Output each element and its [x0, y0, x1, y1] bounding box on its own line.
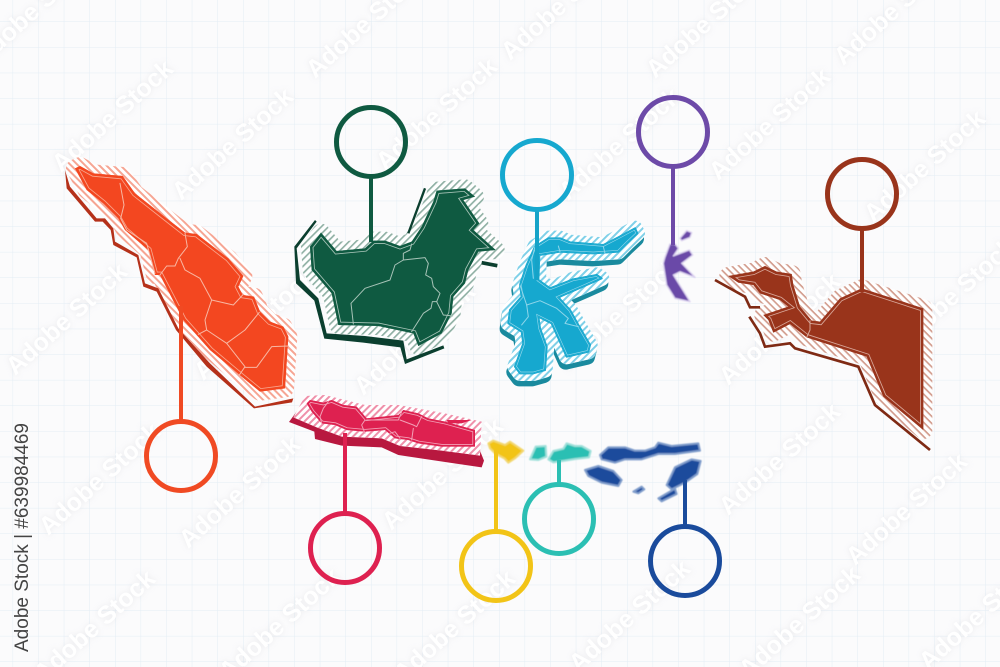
watermarks: Adobe Stock — [34, 417, 166, 541]
watermarks: Adobe Stock — [349, 277, 481, 401]
watermarks: Adobe Stock — [47, 54, 179, 178]
map: Papua — [715, 266, 930, 450]
map: East Nusa Tenggara — [585, 443, 701, 501]
vertical stock id text: Adobe Stock | #639984469 — [12, 423, 33, 652]
watermarks: Adobe Stock — [714, 397, 846, 521]
map: Kalimantan — [294, 188, 497, 364]
ring: Sulawesi — [502, 140, 572, 210]
map: Maluku — [663, 231, 695, 302]
ring: Bali — [462, 532, 530, 600]
map: Sumatra — [65, 166, 293, 408]
watermarks: Adobe Stock — [371, 52, 503, 176]
watermarks: Adobe Stock — [859, 104, 991, 228]
ring: East Nusa Tenggara — [650, 526, 720, 596]
watermarks: Adobe Stock — [174, 430, 306, 554]
ring: Kalimantan — [336, 108, 406, 176]
map: Sulawesi — [507, 228, 637, 379]
ring: Java — [310, 514, 380, 582]
watermarks: Adobe Stock — [554, 252, 686, 376]
marker rings — [146, 98, 896, 600]
watermarks: Adobe Stock — [841, 447, 973, 571]
watermarks: Adobe Stock — [377, 412, 509, 536]
ring: Papua — [828, 160, 896, 228]
ring: Maluku — [638, 98, 708, 166]
map: West Nusa Tenggara — [530, 443, 591, 462]
watermarks: Adobe Stock — [189, 262, 321, 386]
connector lines — [181, 168, 862, 530]
map: Bali — [488, 441, 523, 463]
ring: Sumatra — [146, 422, 216, 490]
watermarks: Adobe Stock — [714, 267, 846, 391]
watermarks: Adobe Stock — [704, 62, 836, 186]
watermarks: Adobe Stock — [167, 82, 299, 206]
watermarks: Adobe Stock — [1, 257, 133, 381]
map: Java — [289, 395, 484, 467]
ring: West Nusa Tenggara — [524, 484, 594, 554]
watermarks: Adobe Stock — [554, 82, 686, 206]
